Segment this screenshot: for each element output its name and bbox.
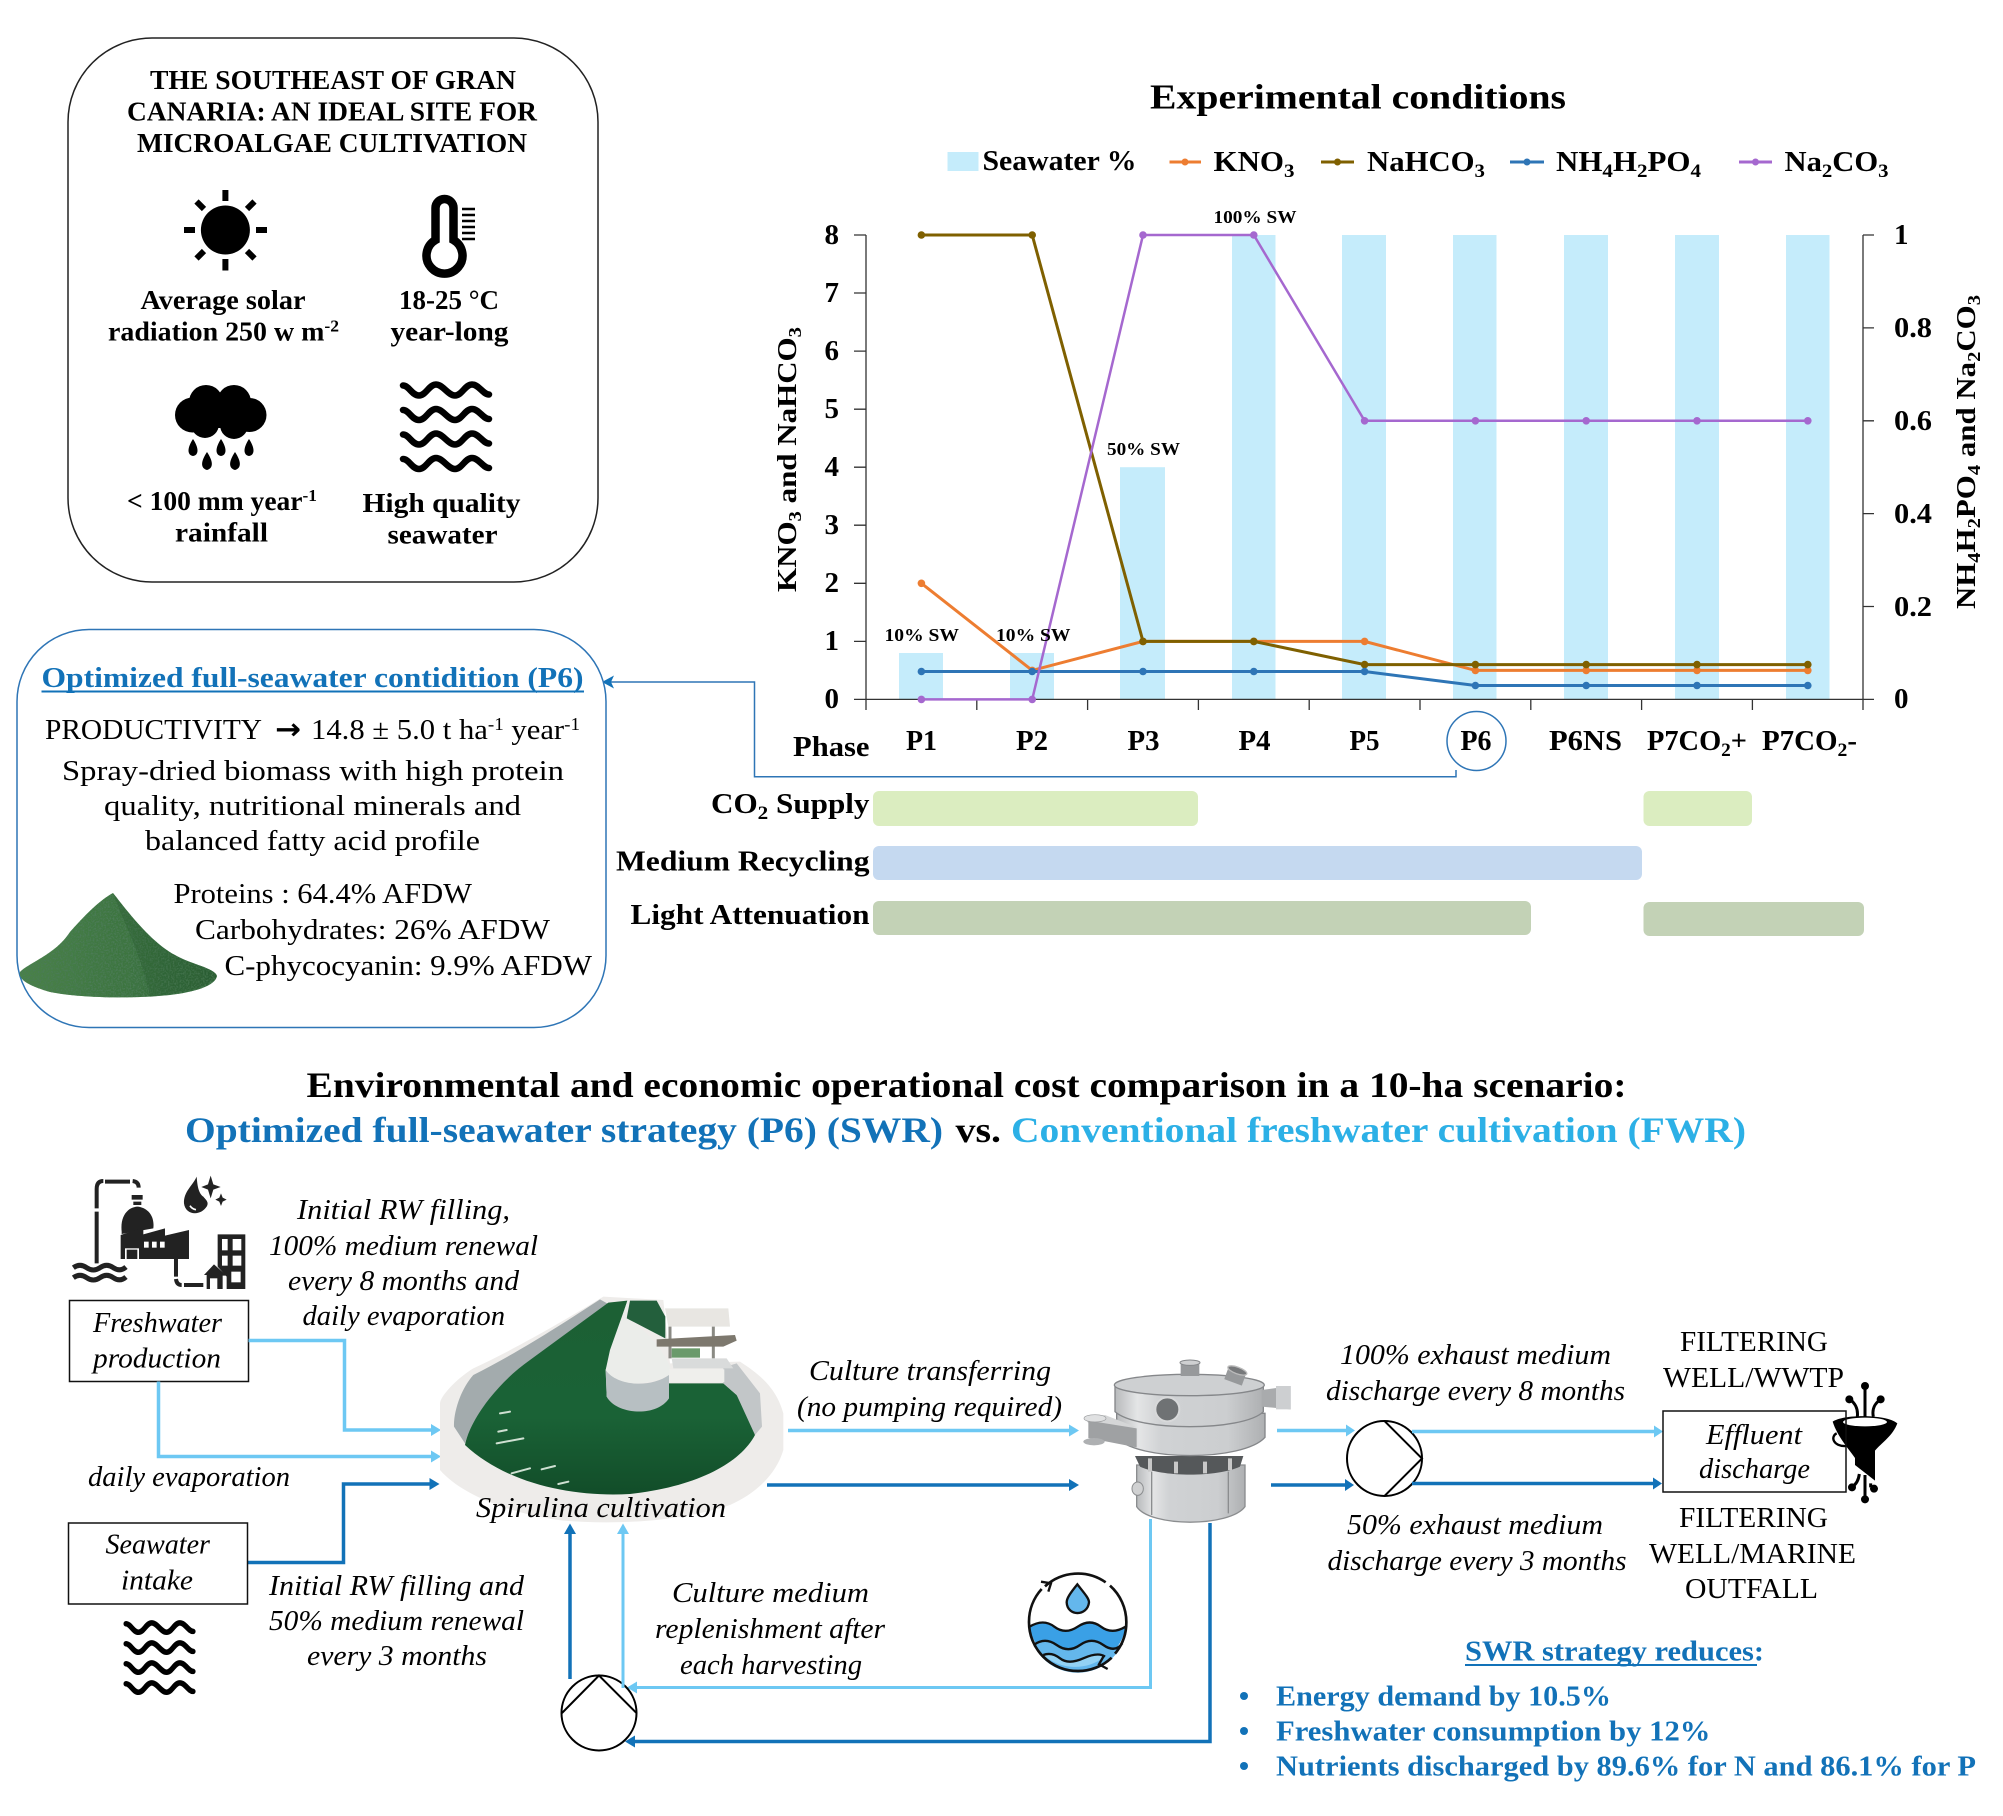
text: seawater discharge destination [1649,1503,1856,1605]
box: freshwater production [70,1300,248,1382]
phase axis labels: P6NS [1549,726,1622,757]
heading: cost comparison: Environmental and economic operational cost comparison in a 10-ha scenario: [306,1065,1626,1105]
CO2 supply row: CO [711,789,753,820]
panel heading: Optimized full-seawater contidition (P6) [42,662,584,694]
light attenuation row [630,900,1864,936]
right axis title: 2 [1964,352,1984,362]
chart legend: 3 [1284,161,1294,182]
text: seawater quality [362,488,521,550]
box: freshwater production: production [91,1344,221,1374]
box: seawater intake: intake [121,1566,193,1596]
biomass description: Spray-dried biomass with high protein [62,755,565,787]
right axis title: CO [1951,305,1981,352]
right axis title: 4 [1964,465,1984,475]
box: freshwater production: Freshwater [92,1308,222,1339]
left axis numbers: 0 [824,683,839,715]
arrow: seawater intake to pond [248,1478,440,1562]
chart legend: 4 [1690,161,1702,182]
CO2 supply row: Supply [768,789,870,820]
phase axis labels: P7CO [1762,726,1835,757]
icon: seawater waves [403,384,489,469]
icon: discharge pump [1347,1421,1422,1496]
icon: sun [184,190,267,270]
text: solar radiation: radiation 250 w m [108,316,317,346]
text: solar radiation: -2 [324,316,339,336]
bullet: freshwater: Freshwater consumption by 12% [1276,1716,1710,1748]
arrow: freshwater evaporation make-up to pond [158,1382,441,1462]
text: temperature: year-long [390,316,509,346]
text: culture transferring: (no pumping required) [797,1392,1062,1423]
text: seawater discharge regime: discharge every 3 months [1328,1546,1627,1577]
productivity line: -1 [488,714,504,734]
icon: thermometer [426,199,475,274]
seawater percentage data labels: 50% SW [1107,439,1180,459]
phase axis labels: 2 [1838,740,1847,761]
text: seawater quality: High quality [362,488,521,518]
left axis numbers: 3 [824,509,839,541]
right axis numbers: 0 [1894,683,1908,715]
phase axis labels: P5 [1350,726,1380,757]
composition figures [174,878,593,982]
chart legend: 2 [1637,161,1648,182]
phase axis labels: P7CO [1647,726,1720,757]
right axis title: PO [1951,475,1981,518]
text: rainfall: < 100 mm year [127,486,299,516]
phase axis labels: P1 [906,726,937,757]
text: freshwater discharge destination: FILTERING [1680,1327,1828,1358]
seawater percentage data labels: 10% SW [996,625,1070,645]
productivity line [45,712,580,746]
right axis title: 3 [1964,295,1984,305]
chart legend: 3 [1475,161,1485,182]
text: rainfall: -1 [303,486,317,505]
productivity line: -1 [564,714,580,734]
productivity line: PRODUCTIVITY [45,714,262,746]
chart: experimental conditions per phase [772,207,1984,763]
right axis title: 4 [1964,552,1984,563]
image: spirulina powder pile [20,893,217,997]
seawater percentage data labels [884,207,1296,645]
composition figures: Carbohydrates: 26% AFDW [195,914,551,946]
right axis numbers: 1 [1894,219,1908,251]
arrow: pump return light line [617,1524,629,1688]
text: seawater filling regime: Initial RW filling and [268,1571,525,1602]
arrow: spent medium light line to pump [627,1519,1150,1694]
phase axis labels [793,726,1857,763]
heading: cost comparison: vs. [956,1110,1001,1150]
heading: experimental conditions: Experimental conditions [1150,78,1566,116]
productivity line: year [504,714,565,746]
medium recycling row [616,846,1642,880]
line: NaHCO3 [918,231,1812,668]
arrow: spent medium dark line to pump [625,1523,1210,1748]
left axis title: 3 [785,511,805,521]
text: culture medium replenishment: each harvesting [680,1650,862,1681]
right axis title: 2 [1964,518,1984,528]
left axis numbers: 6 [824,335,839,367]
text: rainfall: rainfall [175,518,269,548]
right axis numbers: 0.2 [1894,591,1932,623]
text: temperature: 18-25 °C [399,285,499,315]
phase axis labels: P6 [1460,726,1492,757]
CO2 supply row [711,789,1752,826]
chart legend: NaHCO [1367,147,1465,178]
reductions heading: SWR strategy reduces: [1465,1636,1764,1668]
right axis title: H [1951,528,1981,552]
text: freshwater discharge destination [1663,1327,1844,1394]
arrow: culture transfer dark line [767,1479,1079,1491]
text: seawater discharge regime: 50% exhaust medium [1347,1510,1603,1541]
chart legend: 4 [1602,161,1613,182]
arrow: sieve to discharge pump light [1277,1424,1355,1436]
text: seawater discharge destination: OUTFALL [1685,1574,1818,1605]
phase axis labels: P3 [1128,726,1160,757]
right axis numbers [1894,219,1932,715]
text: culture transferring: Culture transferring [809,1356,1051,1387]
left axis numbers [824,219,839,715]
icon: vibrating sieve harvester [1083,1360,1291,1522]
right axis title: NH [1951,568,1981,609]
bullet: nutrients: Nutrients discharged by 89.6% for N and 86.1% for P [1276,1750,1976,1782]
phase axis labels: Phase [793,732,870,763]
arrow: pump to effluent light [1412,1426,1663,1438]
arrow: sieve to discharge pump dark [1271,1479,1354,1491]
seawater percentage data labels: 100% SW [1214,207,1296,227]
text: culture medium replenishment [655,1578,885,1681]
left axis numbers: 4 [824,451,839,483]
text: spirulina cultivation label: Spirulina cultivation [476,1493,726,1524]
box: seawater intake: Seawater [106,1530,210,1560]
icon: filter funnel [1833,1382,1897,1503]
text: solar radiation: Average solar [140,285,306,315]
text: daily evaporation: daily evaporation [88,1462,290,1493]
medium recycling row: Medium Recycling [616,846,870,878]
arrow: culture transfer light line [788,1424,1079,1436]
text block: SWR strategy reductions [1240,1636,1976,1782]
left axis title: 3 [785,327,805,337]
arrow: P6 to optimized condition panel [602,676,1456,777]
phase axis labels: + [1731,726,1747,757]
panel heading: MICROALGAE CULTIVATION [137,128,528,158]
biomass description: quality, nutritional minerals and [104,790,522,822]
seawater percentage data labels: 10% SW [884,625,959,645]
box: effluent discharge: Effluent [1705,1420,1803,1451]
biomass description [62,755,565,857]
icon: freshwater production plant [73,1176,245,1289]
CO2 supply row: 2 [758,803,768,824]
image: spirulina raceway pond [440,1297,783,1522]
operating conditions strip [616,789,1864,936]
box: seawater intake [68,1523,248,1604]
panel: ideal site for microalgae cultivation [68,38,598,582]
text: temperature [390,285,509,346]
line: KNO3 [918,580,1812,674]
text: freshwater filling regime: every 8 months and [288,1266,520,1297]
text: seawater filling regime: every 3 months [307,1641,487,1672]
P6 highlight circle [1447,712,1506,770]
text: freshwater filling regime: 100% medium renewal [269,1231,538,1262]
text: seawater discharge regime [1328,1510,1627,1577]
left axis title: and NaHCO [772,337,802,511]
right axis numbers: 0.6 [1894,405,1932,437]
composition figures: C-phycocyanin: 9.9% AFDW [224,950,593,982]
panel heading [127,65,537,158]
chart legend: 3 [1878,161,1888,182]
box: effluent discharge [1663,1411,1846,1492]
icon: water recycling [1029,1574,1126,1673]
right axis numbers: 0.4 [1894,498,1932,530]
right axis numbers: 0.8 [1894,312,1932,344]
text: freshwater discharge regime: 100% exhaust medium [1340,1340,1611,1371]
panel heading: CANARIA: AN IDEAL SITE FOR [127,96,537,126]
box: effluent discharge: discharge [1699,1454,1810,1485]
text: seawater quality: seawater [388,520,498,550]
chart legend [948,146,1888,182]
icon: seawater waves [126,1623,193,1692]
bullet: energy: Energy demand by 10.5% [1276,1680,1611,1712]
phase axis labels: 2 [1721,740,1731,761]
left axis numbers: 2 [824,567,839,599]
productivity line: 14.8 ± 5.0 t ha [311,714,478,746]
icon: rain cloud [175,385,266,470]
chart legend: 2 [1822,161,1832,182]
heading: cost comparison: Conventional freshwater cultivation (FWR) [1011,1110,1746,1150]
text: seawater filling regime: 50% medium renewal [269,1606,524,1637]
chart legend: Na [1784,147,1819,178]
text: seawater discharge destination: FILTERING [1679,1503,1828,1534]
chart legend: Seawater % [982,146,1136,177]
productivity line: → [275,712,301,746]
left axis numbers: 5 [824,393,839,425]
left axis title: KNO [772,530,802,592]
text: culture transferring [797,1356,1062,1423]
text: solar radiation [108,285,339,346]
composition figures: Proteins : 64.4% AFDW [174,878,473,910]
phase axis labels: - [1847,726,1857,757]
phase axis labels: P4 [1238,726,1270,757]
icon: recirculation pump [562,1676,636,1750]
chart legend: CO [1832,147,1878,178]
chart legend: PO [1648,147,1690,178]
left axis numbers: 7 [824,277,839,309]
text: freshwater filling regime [269,1195,538,1332]
text: rainfall [127,486,317,548]
axes and tick marks [854,235,1874,710]
right axis title: and Na [1951,361,1981,465]
text: freshwater discharge destination: WELL/WWTP [1663,1363,1844,1394]
panel: optimized full-seawater condition [17,630,606,1028]
biomass description: balanced fatty acid profile [145,825,480,857]
heading: cost comparison [185,1065,1746,1150]
bars: seawater percentage [899,235,1830,699]
line: Na2CO3 [918,231,1812,703]
text: seawater discharge destination: WELL/MARINE [1649,1539,1856,1570]
text: culture medium replenishment: replenishment after [655,1614,885,1645]
arrow: pump return dark line [564,1524,576,1679]
heading: cost comparison: Optimized full-seawater strategy (P6) (SWR) [185,1110,943,1150]
text: freshwater filling regime: daily evaporation [302,1301,505,1332]
text: freshwater discharge regime: discharge every 8 months [1326,1376,1625,1407]
text: freshwater discharge regime [1326,1340,1625,1407]
text: freshwater filling regime: Initial RW filling, [296,1195,510,1226]
chart legend: KNO [1214,147,1277,178]
left axis numbers: 8 [824,219,839,251]
line: NH4H2PO4 [918,668,1812,689]
text: seawater filling regime [268,1571,525,1672]
panel heading: THE SOUTHEAST OF GRAN [150,65,516,95]
left axis numbers: 1 [824,625,839,657]
arrow: freshwater production to pond [248,1340,441,1436]
chart legend: NH [1556,147,1598,178]
chart legend: H [1613,147,1637,178]
text: culture medium replenishment: Culture medium [672,1578,869,1609]
phase axis labels: P2 [1016,726,1048,757]
light attenuation row: Light Attenuation [630,900,870,931]
arrow: pump to effluent dark [1412,1478,1662,1490]
